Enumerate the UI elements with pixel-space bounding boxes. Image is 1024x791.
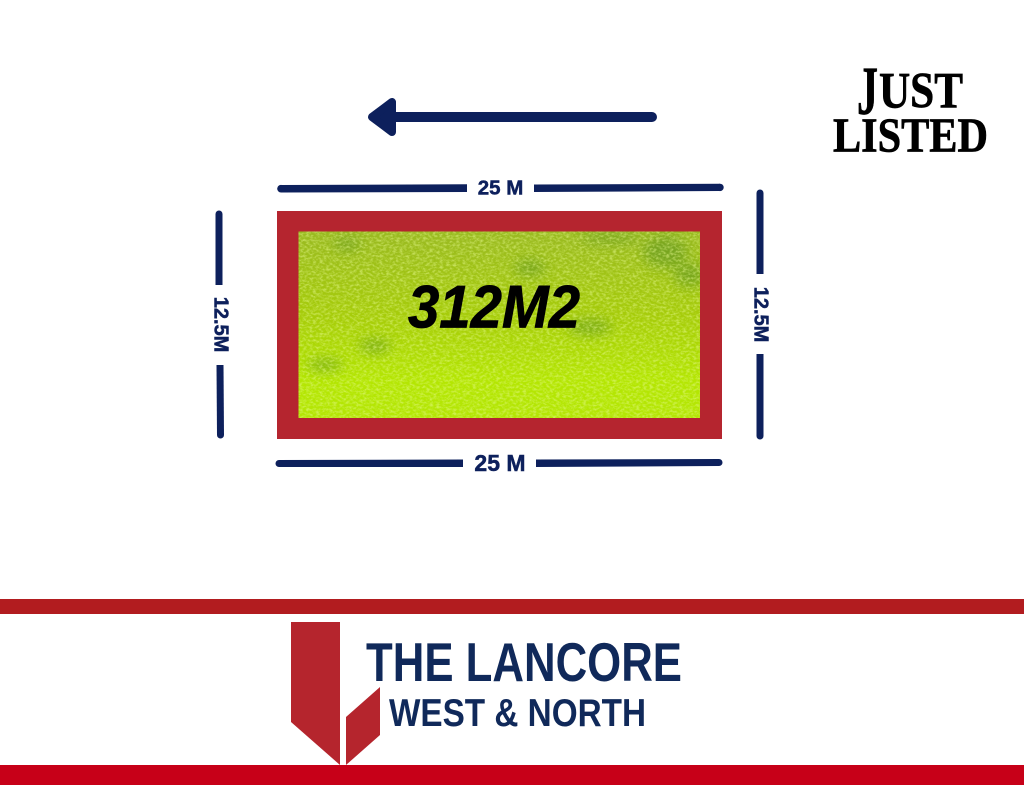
top dimension: 25 M: 25 M <box>478 176 523 200</box>
area label: 312M2 <box>408 274 580 340</box>
logo: The Lancore West & North <box>291 622 682 765</box>
right dimension: 12.5M: 12.5M <box>750 287 772 342</box>
bottom dimension: 25 M <box>276 450 722 476</box>
just listed heading: J <box>857 53 878 129</box>
bottom red band <box>0 765 1024 785</box>
direction arrow <box>372 102 652 132</box>
top dimension: 25 M <box>277 176 724 200</box>
grass lot <box>298 232 706 418</box>
just listed heading <box>833 53 988 162</box>
lot plan <box>277 211 722 439</box>
bottom dimension: 25 M: 25 M <box>474 450 526 476</box>
left dimension: 12.5M: 12.5M <box>210 297 232 352</box>
logo name: THE LANCORE <box>366 631 682 693</box>
logo subtitle: WEST & NORTH <box>389 692 646 735</box>
logo mark <box>291 622 380 765</box>
top red band <box>0 599 1024 614</box>
right dimension: 12.5M <box>750 190 772 440</box>
left dimension: 12.5M <box>210 210 232 438</box>
just listed heading: LISTED <box>833 108 988 162</box>
lot boundary <box>277 211 722 439</box>
just listed heading: UST <box>879 64 963 120</box>
